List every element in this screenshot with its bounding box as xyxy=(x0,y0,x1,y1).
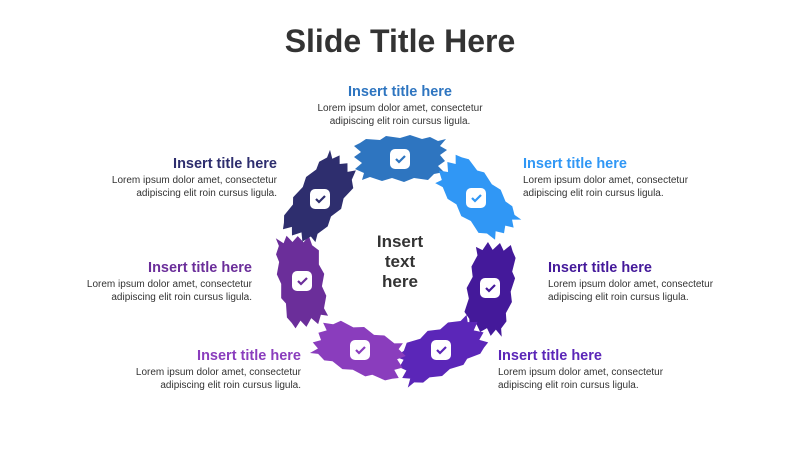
text top: Insert title here xyxy=(348,84,452,100)
text top-left: adipiscing elit roin cursus ligula. xyxy=(136,188,277,199)
text top-left: Lorem ipsum dolor amet, consectetur xyxy=(112,175,277,186)
segment left xyxy=(272,231,331,330)
text top-right: adipiscing elit roin cursus ligula. xyxy=(523,188,664,199)
text top-right xyxy=(523,156,688,199)
text left xyxy=(87,260,252,303)
text right: adipiscing elit roin cursus ligula. xyxy=(548,292,689,303)
text bottom-left: Insert title here xyxy=(197,348,301,364)
text right xyxy=(548,260,713,303)
segment top-left xyxy=(274,147,366,250)
text right: Insert title here xyxy=(548,260,652,276)
text bottom-left: Lorem ipsum dolor amet, consectetur xyxy=(136,367,301,378)
text top-right: Lorem ipsum dolor amet, consectetur xyxy=(523,175,688,186)
text bottom-right: adipiscing elit roin cursus ligula. xyxy=(498,380,639,391)
segment bottom-right xyxy=(389,310,493,392)
text bottom-right: Lorem ipsum dolor amet, consectetur xyxy=(498,367,663,378)
text right: Lorem ipsum dolor amet, consectetur xyxy=(548,279,713,290)
text top: Lorem ipsum dolor amet, consectetur xyxy=(317,103,483,114)
text left: adipiscing elit roin cursus ligula. xyxy=(111,292,252,303)
title: Slide Title Here xyxy=(285,23,515,59)
text left: Insert title here xyxy=(148,260,252,276)
center text: Insert xyxy=(377,232,423,251)
center text: text xyxy=(385,252,415,271)
segment top-right xyxy=(428,148,525,249)
text top-left: Insert title here xyxy=(173,156,277,172)
segment top xyxy=(354,135,447,182)
text bottom-left: adipiscing elit roin cursus ligula. xyxy=(160,380,301,391)
segment bottom-left xyxy=(308,312,411,388)
segment right xyxy=(459,239,522,338)
center text xyxy=(377,232,423,291)
text top xyxy=(317,84,483,127)
text top-left xyxy=(112,156,277,199)
text left: Lorem ipsum dolor amet, consectetur xyxy=(87,279,252,290)
text top: adipiscing elit roin cursus ligula. xyxy=(330,116,470,127)
center text: here xyxy=(382,272,418,291)
text bottom-left xyxy=(136,348,301,391)
text top-right: Insert title here xyxy=(523,156,627,172)
text bottom-right: Insert title here xyxy=(498,348,602,364)
text bottom-right xyxy=(498,348,663,391)
